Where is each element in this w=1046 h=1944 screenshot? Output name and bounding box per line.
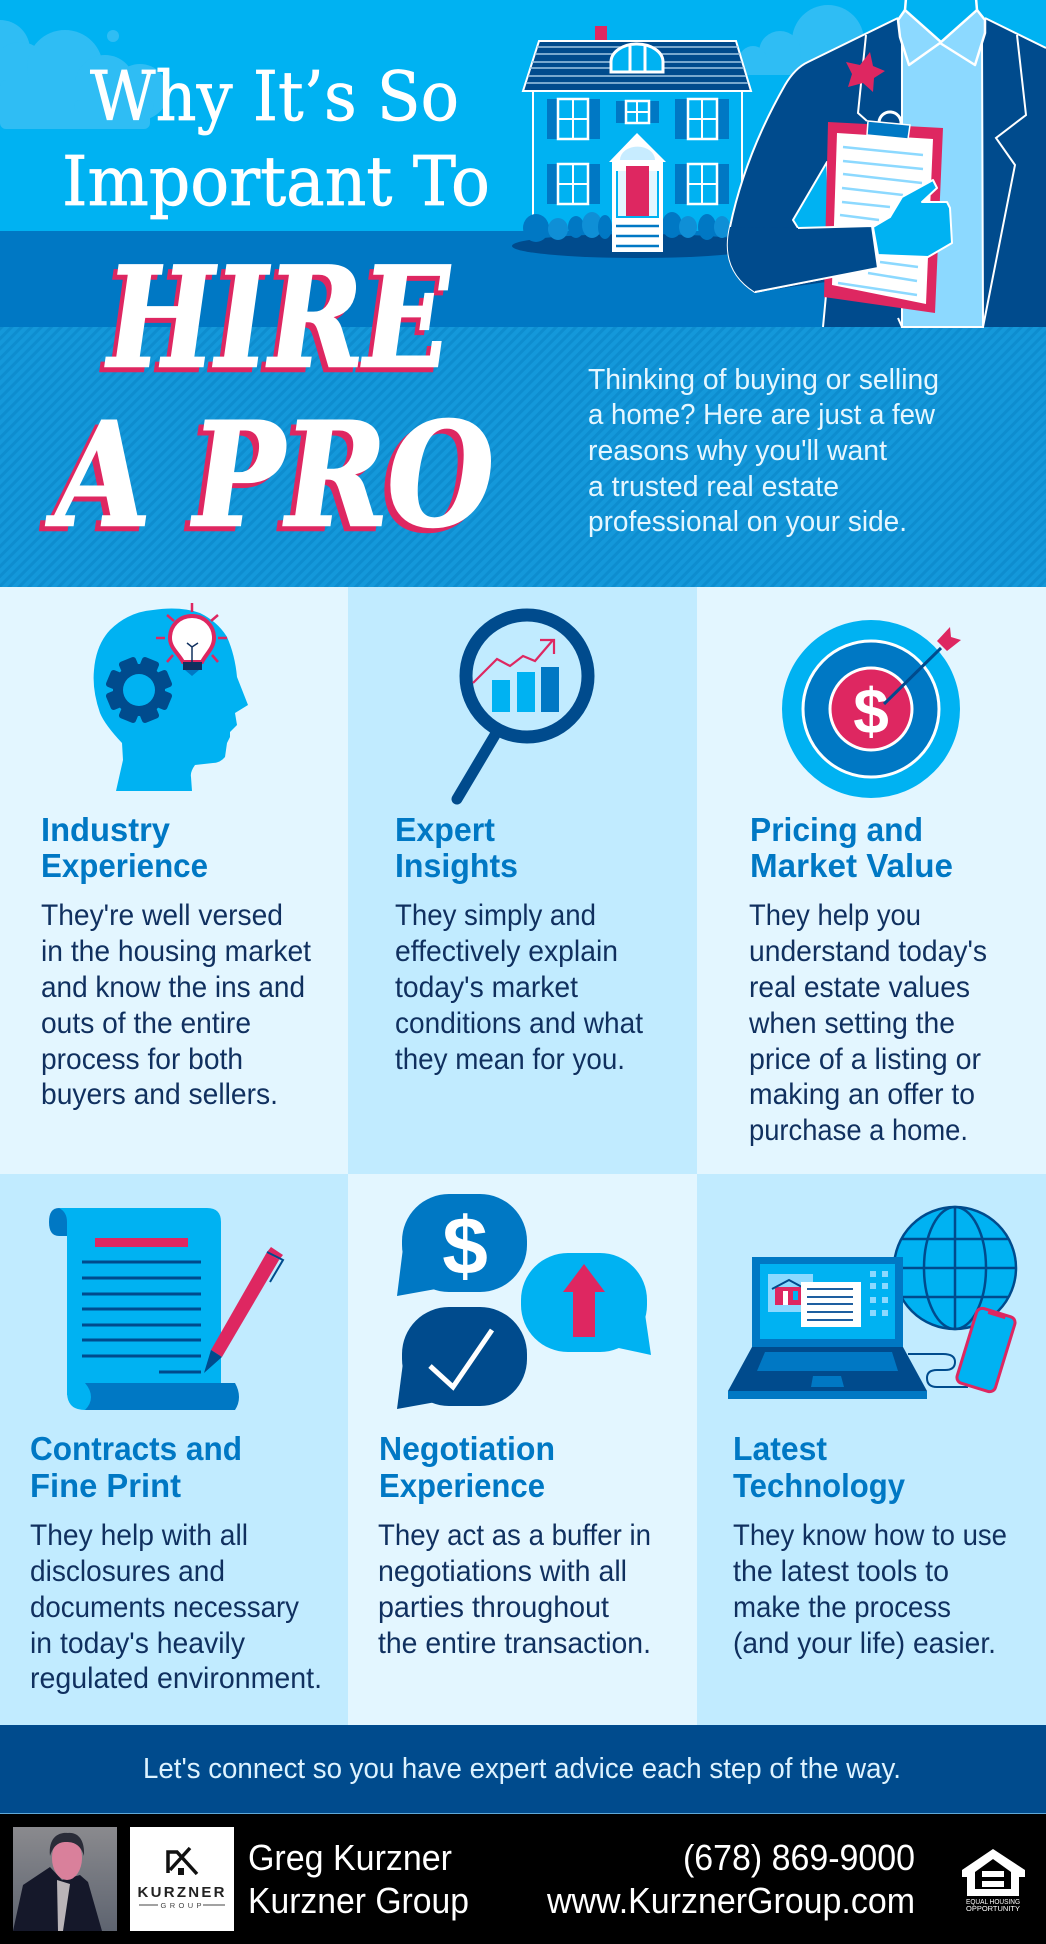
panel: industry experience [0,587,348,1174]
icon: target with dollar [782,620,961,798]
panel: header sky [0,0,1046,231]
body text [395,899,644,1076]
company logo [130,1827,234,1931]
heading [395,811,518,884]
body text: effectively explain [395,935,618,968]
heading: Industry [41,811,171,848]
heading: Contracts and [30,1430,242,1467]
icon: target with dollar: $ [853,675,889,747]
body text: They're well versed [41,899,283,932]
icon: speech bubble with dollar: $ [442,1201,488,1292]
body text: when setting the [748,1007,955,1040]
body text: in the housing market [41,935,312,968]
heading: Negotiation [379,1430,555,1467]
heading: Experience [41,847,208,884]
body text: the entire transaction. [378,1627,651,1660]
icon: left cloud [0,20,168,129]
icon: contract scroll and pen [49,1208,283,1410]
text block: intro: professional on your side. [588,506,907,538]
body text: disclosures and [30,1555,225,1588]
body text: making an offer to [749,1078,975,1111]
title: A PRO: A PRO [35,396,500,564]
heading: Insights [395,847,518,884]
heading: Latest [733,1430,827,1467]
panel: negotiation experience [348,1174,697,1725]
heading [379,1430,555,1504]
body text [748,899,987,1147]
body text: the latest tools to [733,1555,949,1588]
icon: right cloud [739,5,866,77]
body text: They help you [749,899,921,932]
sleeve over clipboard [728,226,878,292]
body text: understand today's [749,935,987,968]
agent name: Kurzner Group [248,1880,469,1921]
body text: They act as a buffer in [378,1519,651,1552]
icon: house [512,26,764,258]
icon: laptop, globe and phone [728,1207,1017,1399]
jacket outline [728,18,1046,327]
icon: speech bubble with dollar [397,1194,527,1296]
shirt [902,40,983,327]
body text: purchase a home. [749,1114,968,1147]
title: HIRE: HIRE [95,237,461,399]
body text: documents necessary [30,1591,299,1624]
callout bar [0,1725,1046,1813]
panel: contracts and fine print [0,1174,348,1725]
panel: expert insights [348,587,697,1174]
title: why it's so important to: Why It’s So [90,58,459,137]
body text: and know the ins and [41,971,305,1004]
body text: today's market [395,971,579,1004]
heading: Expert [395,811,495,848]
body text: real estate values [749,971,970,1004]
body text: (and your life) easier. [733,1627,996,1660]
heading [41,811,208,884]
body text [30,1519,322,1695]
icon: speech bubble with up arrow [521,1253,651,1355]
body text: in today's heavily [30,1627,245,1660]
heading [733,1430,906,1504]
text block: intro: a home? Here are just a few [588,399,936,431]
panel: pricing and market value [697,587,1046,1174]
hand [873,180,952,257]
body text: They help with all [30,1519,248,1552]
forearm gap [793,162,830,228]
body text [733,1519,1007,1660]
body text: conditions and what [395,1007,644,1040]
heading: Technology [733,1467,906,1504]
body text: price of a listing or [749,1043,981,1076]
agent photo [13,1827,117,1931]
jacket body [728,18,1046,327]
contact details [546,1837,915,1921]
icon: equal housing opportunity [962,1849,1025,1913]
heading [750,811,953,884]
contact details: www.KurznerGroup.com [546,1880,915,1921]
heading: Experience [379,1467,545,1504]
lapel star [846,52,885,92]
body text: outs of the entire [41,1007,251,1040]
agent name [248,1837,469,1921]
body text: They know how to use [733,1519,1007,1552]
text block: intro: reasons why you'll want [588,435,887,467]
title: HIRE: HIRE [90,242,456,404]
heading: Market Value [750,847,953,884]
heading: Fine Print [30,1467,181,1504]
company logo: GROUP [160,1901,202,1910]
body text: buyers and sellers. [41,1078,278,1111]
body text: They simply and [395,899,596,932]
body text: make the process [733,1591,951,1624]
text block: intro: Thinking of buying or selling [588,364,939,396]
body text: regulated environment. [30,1662,322,1695]
company logo: KURZNER [138,1884,225,1901]
clipboard [824,122,943,313]
icon: magnifying glass with chart [457,615,588,799]
callout bar: Let's connect so you have expert advice each step of the way. [143,1753,901,1785]
body text: they mean for you. [395,1043,625,1076]
icon: speech bubble with check [397,1307,527,1409]
title: A PRO: A PRO [41,391,506,559]
body text: parties throughout [378,1591,610,1624]
heading: Pricing and [750,811,923,848]
title: why it's so important to [62,58,490,222]
icon: equal housing opportunity: OPPORTUNITY [966,1904,1020,1913]
panel: hatched intro background [0,327,1046,587]
body text [378,1519,651,1660]
body text [41,899,312,1111]
heading [30,1430,242,1504]
icon: equal housing opportunity: EQUAL HOUSING [966,1897,1020,1906]
title: why it's so important to: Important To [62,143,490,222]
text block: intro: a trusted real estate [588,471,839,503]
contact details: (678) 869-9000 [683,1837,915,1878]
neck [905,0,977,42]
agent name: Greg Kurzner [248,1837,452,1878]
body text: negotiations with all [378,1555,627,1588]
footer [0,1813,1046,1944]
collar [898,10,985,65]
icon: agent in suit with clipboard [728,0,1046,327]
panel: latest technology [697,1174,1046,1725]
panel: header band [0,231,1046,328]
icon: head with gear and bulb [94,603,248,791]
text block: intro [588,364,939,538]
body text: process for both [41,1043,243,1076]
